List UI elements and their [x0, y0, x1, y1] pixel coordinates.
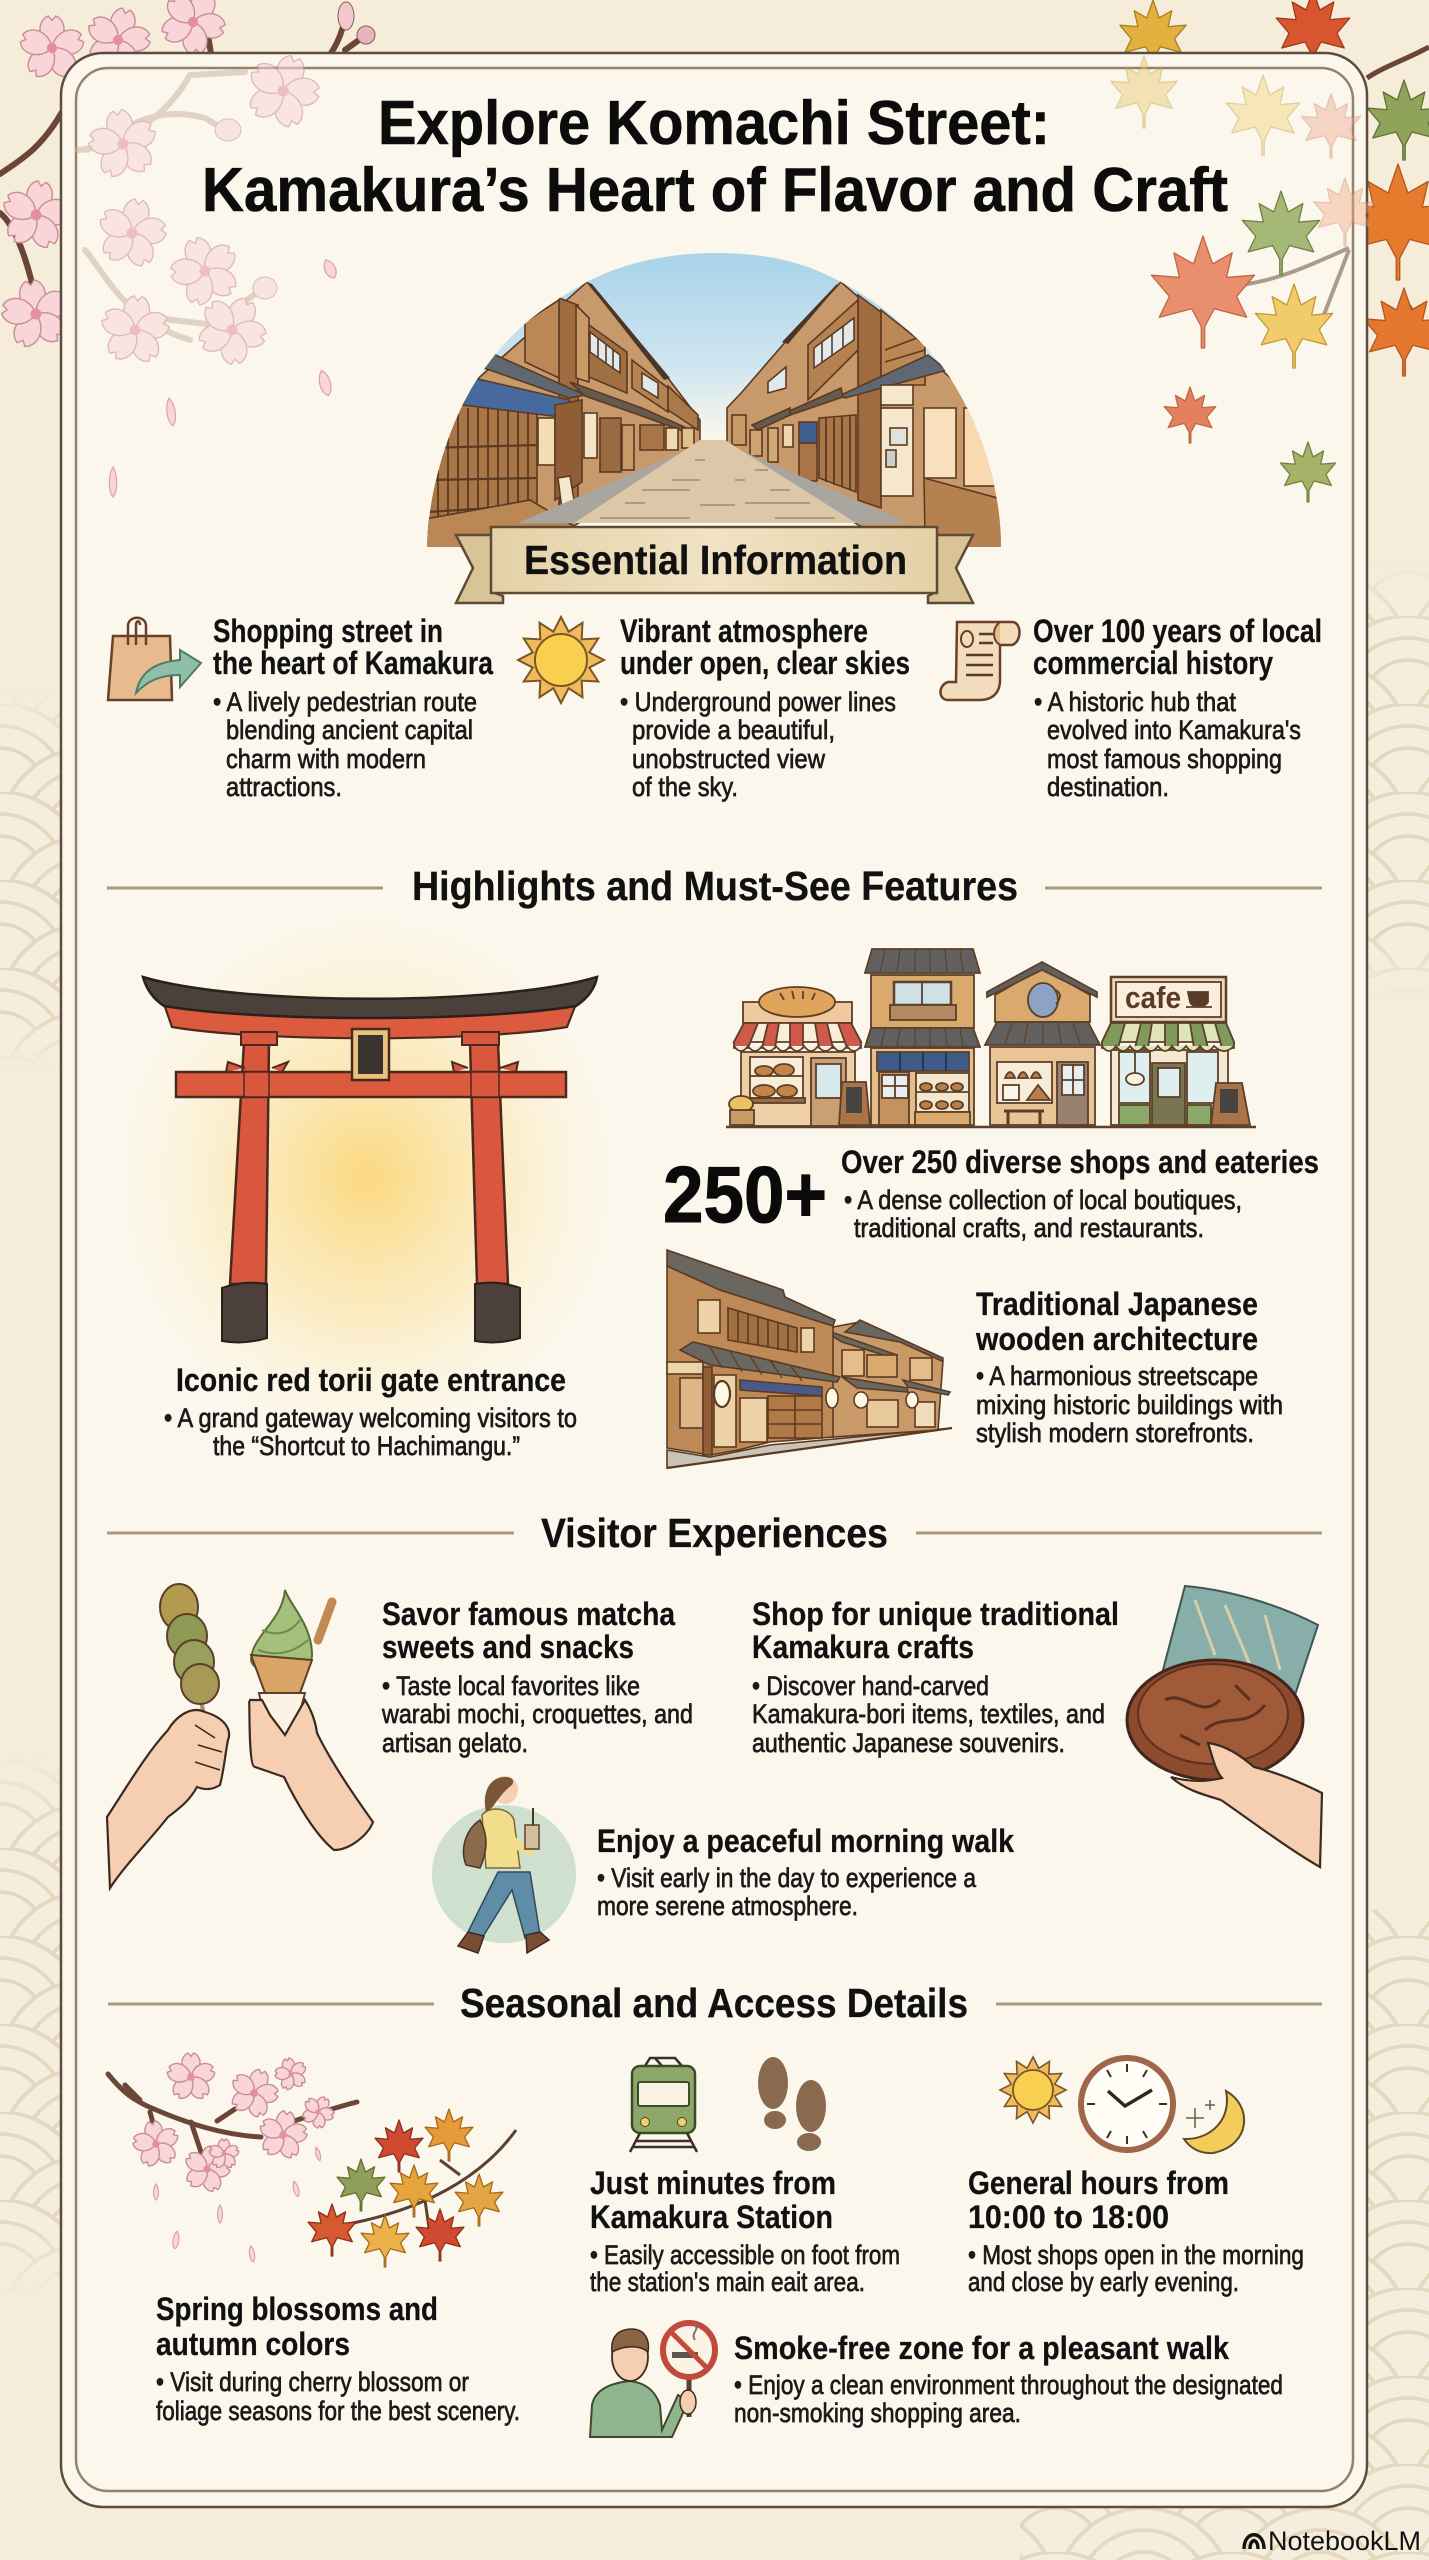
- text: matcha sweets: warabi mochi, croquettes, and: [381, 1699, 693, 1729]
- text: shopping street: [213, 613, 493, 802]
- text: torii gate: Iconic red torii gate entrance: [176, 1362, 566, 1398]
- text: local history: • A historic hub that: [1034, 687, 1236, 717]
- big number 250+: 250+: [663, 1150, 827, 1239]
- text: station access: Just minutes from: [590, 2165, 836, 2201]
- shop: pottery: [985, 962, 1100, 1125]
- background wave pattern: right lower: [1360, 1910, 1429, 2560]
- section heading: highlights: Highlights and Must-See Features: [412, 863, 1018, 909]
- text: vibrant atmosphere: Vibrant atmosphere: [620, 613, 868, 649]
- text: traditional crafts: Kamakura crafts: [752, 1629, 974, 1665]
- illustration: person with no-smoking sign: [590, 2323, 715, 2437]
- illustration: wooden architecture: [667, 1250, 952, 1468]
- hero illustration: street in arch: [420, 250, 1010, 560]
- text: torii gate: [164, 1362, 577, 1461]
- illustration: torii gate with glow: [117, 912, 617, 1442]
- icon: footprints: [758, 2057, 826, 2151]
- illustration: row of shops: [726, 949, 1256, 1127]
- title: [202, 89, 1228, 225]
- text: general hours: • Most shops open in the morning: [968, 2240, 1304, 2270]
- section heading: visitor experiences: Visitor Experiences: [541, 1510, 888, 1556]
- illustration: person on morning walk: [432, 1776, 576, 1953]
- falling petals: [109, 258, 339, 497]
- text: matcha sweets: Savor famous matcha: [382, 1596, 675, 1632]
- illustration: spring blossom and autumn leaf branches: [108, 2053, 516, 2267]
- shop: cafe: [1102, 977, 1250, 1125]
- rear buildings: [817, 1322, 943, 1437]
- text: general hours: [968, 2165, 1304, 2297]
- text: shopping street: charm with modern: [226, 744, 426, 774]
- text: vibrant atmosphere: [620, 613, 910, 802]
- text: general hours: and close by early evening.: [968, 2267, 1239, 2297]
- text: local history: destination.: [1047, 772, 1169, 802]
- text: 250 shops: • A dense collection of local boutiques,: [844, 1185, 1242, 1215]
- text: local history: commercial history: [1033, 645, 1273, 681]
- text: spring and autumn: [156, 2291, 520, 2426]
- icon: train: [630, 2058, 697, 2152]
- text: station access: • Easily accessible on foot from: [590, 2240, 900, 2270]
- text: 250 shops: Over 250 diverse shops and eateries: [841, 1144, 1319, 1180]
- text: wooden architecture: [975, 1286, 1283, 1448]
- text: traditional crafts: Kamakura-bori items, textiles, and: [752, 1699, 1105, 1729]
- text: spring and autumn: autumn colors: [156, 2326, 350, 2362]
- illustration: textile, carved bowl and hand: [1127, 1586, 1322, 1867]
- text: traditional crafts: [752, 1596, 1119, 1758]
- text: morning walk: more serene atmosphere.: [597, 1891, 858, 1921]
- text: shopping street: the heart of Kamakura: [213, 645, 493, 681]
- text: wooden architecture: Traditional Japanese: [976, 1286, 1258, 1322]
- text: traditional crafts: Shop for unique traditional: [752, 1596, 1119, 1632]
- cherry blossoms outside the frame: [0, 0, 375, 355]
- illustration: dango skewer in hand: [107, 1584, 229, 1888]
- text: local history: evolved into Kamakura's: [1047, 715, 1301, 745]
- text: morning walk: • Visit early in the day to experience a: [597, 1863, 977, 1893]
- text: matcha sweets: sweets and snacks: [382, 1629, 634, 1665]
- background wave pattern: right upper: [1368, 579, 1429, 979]
- background wave pattern: bottom right: [1020, 2505, 1429, 2560]
- text: wooden architecture: • A harmonious streetscape: [976, 1361, 1258, 1391]
- text: vibrant atmosphere: of the sky.: [632, 772, 738, 802]
- text: spring and autumn: foliage seasons for the best scenery.: [156, 2396, 520, 2426]
- shop: bakery: [729, 987, 870, 1126]
- left row of wooden buildings: [420, 282, 700, 555]
- text: morning walk: Enjoy a peaceful morning walk: [597, 1823, 1014, 1859]
- text: wooden architecture: mixing historic buildings with: [976, 1390, 1283, 1420]
- text: shopping street: • A lively pedestrian route: [213, 687, 477, 717]
- title: Explore Komachi Street:: [378, 89, 1050, 158]
- text: torii gate: • A grand gateway welcoming visitors to: [164, 1403, 577, 1433]
- illustration: matcha soft serve in hand: [249, 1590, 373, 1850]
- background wave pattern: left upper: [0, 706, 60, 1054]
- text: 250 shops: traditional crafts, and restaurants.: [854, 1213, 1204, 1243]
- text: vibrant atmosphere: provide a beautiful,: [632, 715, 835, 745]
- section heading: seasonal and access: Seasonal and Access Details: [460, 1980, 968, 2026]
- title: Kamakura’s Heart of Flavor and Craft: [202, 156, 1228, 225]
- text: shopping street: Shopping street in: [213, 613, 443, 649]
- text: morning walk: [597, 1823, 1014, 1921]
- text: traditional crafts: • Discover hand-carved: [752, 1671, 989, 1701]
- shop: cafe: cafe: [1125, 980, 1181, 1015]
- text: general hours: 10:00 to 18:00: [968, 2199, 1169, 2235]
- text: spring and autumn: Spring blossoms and: [156, 2291, 438, 2327]
- ribbon banner: Essential Information: Essential Information: [524, 537, 907, 583]
- text: matcha sweets: [381, 1596, 693, 1758]
- text: wooden architecture: wooden architecture: [975, 1321, 1258, 1357]
- faded cherry blossom branch inside the frame: [78, 44, 331, 378]
- text: smoke-free zone: non-smoking shopping area.: [734, 2398, 1021, 2428]
- ribbon banner: Essential Information: [456, 527, 973, 603]
- text: shopping street: blending ancient capital: [226, 715, 473, 745]
- icon: sun, clock and moon: [1000, 2057, 1244, 2153]
- background wave pattern: left lower: [0, 1772, 60, 2278]
- NotebookLM watermark: NotebookLM: [1268, 2526, 1421, 2556]
- paved street: [518, 440, 909, 523]
- text: smoke-free zone: [734, 2330, 1283, 2428]
- text: local history: most famous shopping: [1047, 744, 1282, 774]
- text: wooden architecture: stylish modern storefronts.: [976, 1418, 1254, 1448]
- text: smoke-free zone: • Enjoy a clean environment throughout the designated: [734, 2370, 1283, 2400]
- icon: sun: [518, 617, 604, 703]
- shop: two-storey shop: [865, 949, 980, 1125]
- text: local history: Over 100 years of local: [1033, 613, 1322, 649]
- text: shopping street: attractions.: [226, 772, 342, 802]
- text: vibrant atmosphere: • Underground power lines: [620, 687, 896, 717]
- text: torii gate: the “Shortcut to Hachimangu.”: [213, 1431, 520, 1461]
- text: vibrant atmosphere: unobstructed view: [632, 744, 825, 774]
- text: smoke-free zone: Smoke-free zone for a pleasant walk: [734, 2330, 1229, 2366]
- icon: history scroll: [940, 622, 1020, 700]
- text: vibrant atmosphere: under open, clear skies: [620, 645, 910, 681]
- text: spring and autumn: • Visit during cherry blossom or: [156, 2367, 469, 2397]
- front building: [667, 1266, 833, 1455]
- text: general hours: General hours from: [968, 2165, 1229, 2201]
- ground pavement: [667, 1428, 952, 1468]
- text: matcha sweets: • Taste local favorites like: [382, 1671, 640, 1701]
- maple branch inside the frame: [1111, 56, 1376, 502]
- text: traditional crafts: authentic Japanese souvenirs.: [752, 1728, 1065, 1758]
- text: matcha sweets: artisan gelato.: [382, 1728, 528, 1758]
- icon: shopping bag with arrow: [108, 618, 201, 700]
- text: station access: Kamakura Station: [590, 2199, 833, 2235]
- text: local history: [1033, 613, 1322, 802]
- text: 250 shops: [841, 1144, 1319, 1243]
- text: station access: the station's main eait area.: [590, 2267, 865, 2297]
- text: station access: [590, 2165, 900, 2297]
- right row of wooden buildings: [727, 282, 1010, 560]
- autumn maple leaves outside the frame: [1120, 0, 1429, 376]
